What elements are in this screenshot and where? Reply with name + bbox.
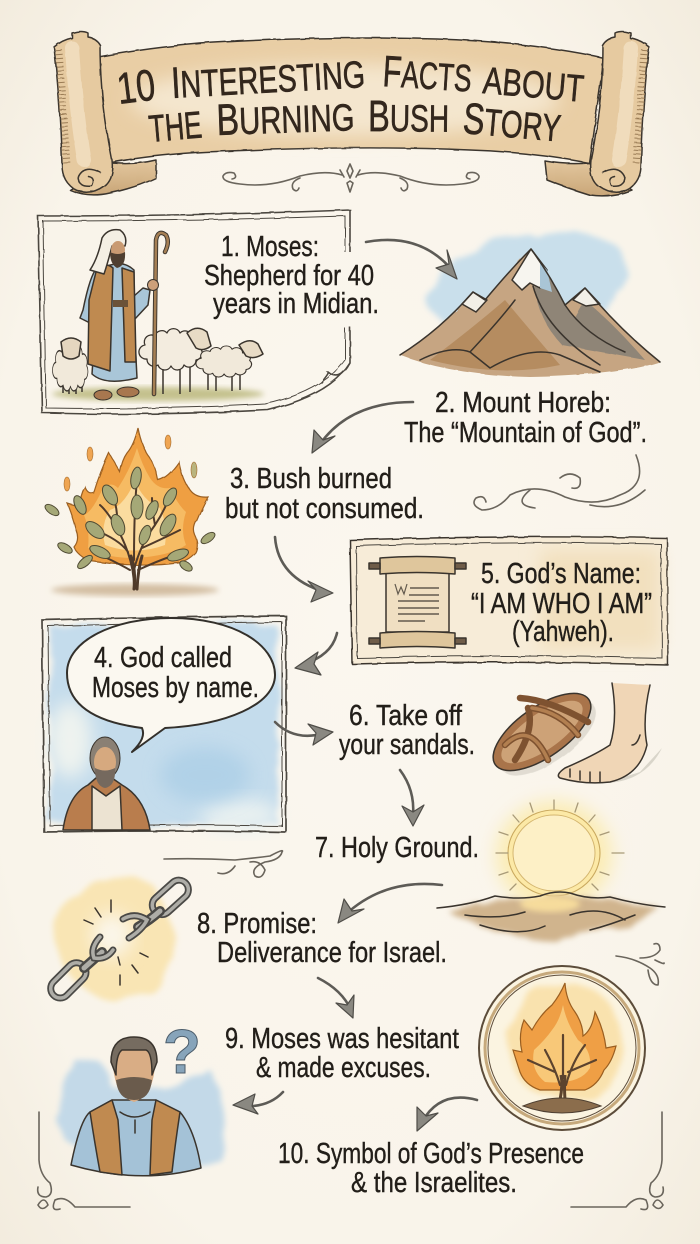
heading: ABOUT	[481, 60, 585, 111]
fact 5 text: (Yahweh).	[512, 616, 614, 648]
panel frame	[42, 616, 286, 832]
fact 4 text: 4. God called	[94, 642, 232, 674]
corner flourish bottom left	[38, 1112, 130, 1210]
icon: left sheep	[52, 338, 88, 394]
fact 1 text: years in Midian.	[213, 288, 379, 320]
mountain mass	[400, 249, 660, 377]
arrow: fact 1 to 2	[366, 240, 457, 279]
fact 3 text: but not consumed.	[225, 493, 424, 525]
icon: burning bush	[43, 428, 219, 596]
decorative corner flourish right	[616, 944, 664, 985]
arrow: fact 4 to 6	[275, 722, 333, 745]
arrow: fact 6 to 7	[400, 770, 424, 826]
icon: burning tree medallion	[479, 966, 645, 1130]
banner body	[98, 38, 604, 163]
icon: parchment scroll	[369, 556, 466, 648]
fact 9 text	[225, 1023, 459, 1084]
panel frame	[38, 210, 350, 414]
decorative swirl left of fact 7	[164, 851, 282, 877]
fact 3 text	[225, 463, 424, 525]
fact 1 text: 1. Moses:	[221, 231, 319, 263]
left scroll roller	[54, 32, 112, 192]
fact 5 text: 5. God’s Name:	[481, 558, 641, 590]
icon: question mark: ?	[163, 1018, 201, 1087]
fact 10 text: 10. Symbol of God’s Presence	[278, 1138, 584, 1170]
icon: sandal	[481, 679, 608, 790]
fact 8 text: Deliverance for Israel.	[217, 937, 447, 969]
fact 2 text: 2. Mount Horeb:	[435, 387, 611, 419]
title ornament	[223, 164, 479, 192]
fact 4 text	[92, 642, 259, 704]
fact 6 text: your sandals.	[339, 729, 475, 761]
heading: STORY	[461, 94, 563, 152]
flying embers	[64, 435, 197, 491]
heading: THE	[147, 105, 204, 151]
fact 8 text	[197, 908, 447, 969]
icon: hesitant Moses	[59, 1037, 223, 1176]
fact 7 text: 7. Holy Ground.	[315, 832, 479, 864]
fact 8 text: 8. Promise:	[197, 908, 317, 940]
icon: holy ground	[437, 892, 665, 939]
banner tails	[70, 160, 632, 196]
fact 2 text: The “Mountain of God”.	[404, 417, 647, 449]
arrow: fact 8 to 9	[318, 978, 354, 1018]
icon: person	[63, 737, 150, 830]
icon: Moses with staff	[80, 230, 168, 400]
fact 10 text	[278, 1138, 584, 1199]
panel background	[350, 537, 668, 665]
heading: BURNING	[216, 91, 355, 145]
icon: rising sun	[496, 800, 624, 909]
arrow: medallion to fact 10	[417, 1098, 477, 1131]
banner highlight	[130, 64, 560, 136]
fact 2 text	[404, 387, 647, 449]
heading: INTERESTING	[170, 48, 366, 108]
icon: right sheep	[196, 341, 263, 391]
lower chain	[47, 937, 113, 1002]
heading: 10	[114, 61, 158, 114]
fact 6 text: 6. Take off	[349, 700, 463, 732]
arrow: fact 5 to 4	[295, 633, 337, 675]
fact 5 text	[471, 558, 652, 648]
fact 9 text: 9. Moses was hesitant	[225, 1023, 459, 1055]
upper chain	[123, 876, 192, 938]
fact 6 text	[339, 700, 475, 761]
icon: broken chain	[47, 876, 192, 1002]
panel: fact 5 God's name	[350, 537, 668, 665]
arrow: fact 7 to 8	[338, 884, 442, 923]
branches	[95, 480, 180, 587]
panel: fact 1 Moses	[38, 210, 379, 414]
icon: middle sheep	[139, 328, 211, 394]
decorative swirl right of fact 3	[474, 455, 645, 510]
fact 9 text: & made excuses.	[256, 1052, 431, 1084]
medallion flame	[513, 983, 616, 1090]
speech bubble	[67, 618, 275, 752]
grass	[52, 387, 264, 401]
arrow: fact 2 to 3	[312, 402, 413, 453]
heading: FACTS	[381, 47, 473, 102]
heading: BUSH	[368, 92, 449, 142]
fact 10 text: & the Israelites.	[351, 1167, 517, 1199]
title banner	[54, 32, 649, 196]
leaves	[43, 466, 217, 573]
right scroll roller	[591, 32, 649, 192]
icon: mountain	[400, 232, 660, 377]
fact 3 text: 3. Bush burned	[230, 463, 392, 495]
arrow: fact 9 to hesitant Moses	[233, 1092, 283, 1114]
icon: bare foot	[558, 683, 662, 783]
sparks	[84, 900, 148, 985]
panel: fact 4 God called Moses	[42, 616, 286, 832]
blue wash	[50, 626, 278, 824]
corner flourish bottom right	[571, 1112, 663, 1210]
heading	[114, 47, 585, 152]
fact 4 text: Moses by name.	[92, 672, 259, 704]
fact 1 text: Shepherd for 40	[204, 260, 374, 292]
arrow: fact 3 to 5	[275, 537, 333, 602]
fact 1 text	[204, 231, 379, 320]
fact 5 text: “I AM WHO I AM”	[471, 588, 652, 620]
